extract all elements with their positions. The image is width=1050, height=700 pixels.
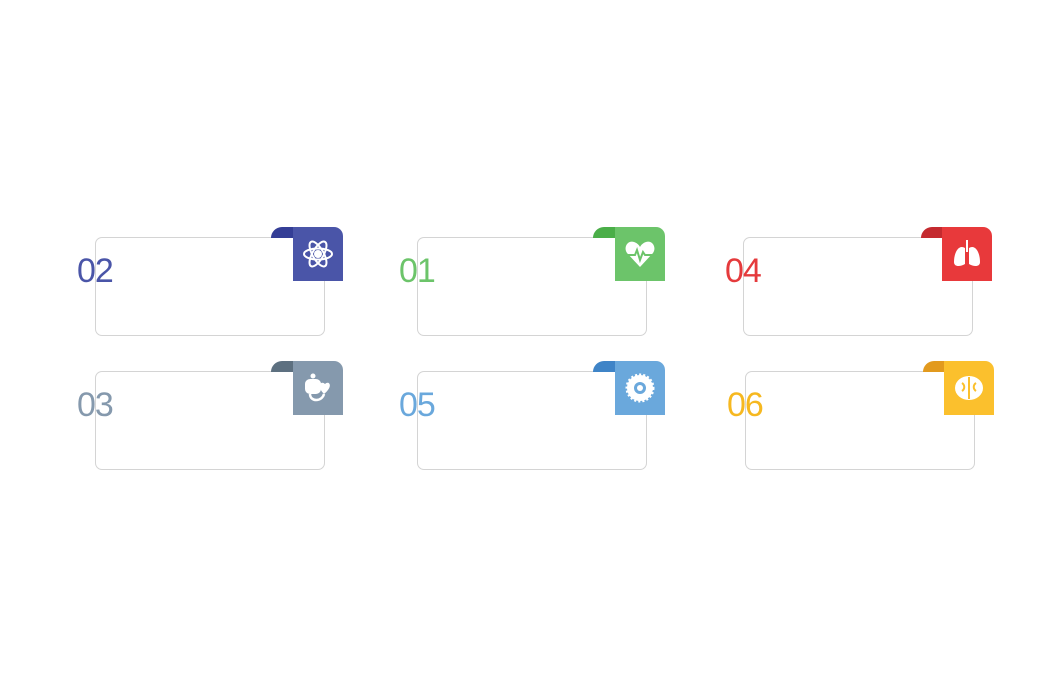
icon tab: brain [944, 361, 994, 415]
icon tab: heart pulse [615, 227, 665, 281]
card 02 [77, 227, 343, 336]
icon tab: atom [293, 227, 343, 281]
card 05 [399, 361, 665, 470]
card 01 [399, 227, 665, 336]
card 03 [77, 361, 343, 470]
number 03: 03 [77, 386, 113, 424]
icon tab: saw blade [615, 361, 665, 415]
icon tab: stethoscope [293, 361, 343, 415]
number 05: 05 [399, 386, 435, 424]
card 06 [727, 361, 994, 470]
card 04 [725, 227, 992, 336]
number 02: 02 [77, 252, 113, 290]
number 01: 01 [399, 252, 435, 290]
icon tab: lungs [942, 227, 992, 281]
number 04: 04 [725, 252, 761, 290]
number 06: 06 [727, 386, 763, 424]
